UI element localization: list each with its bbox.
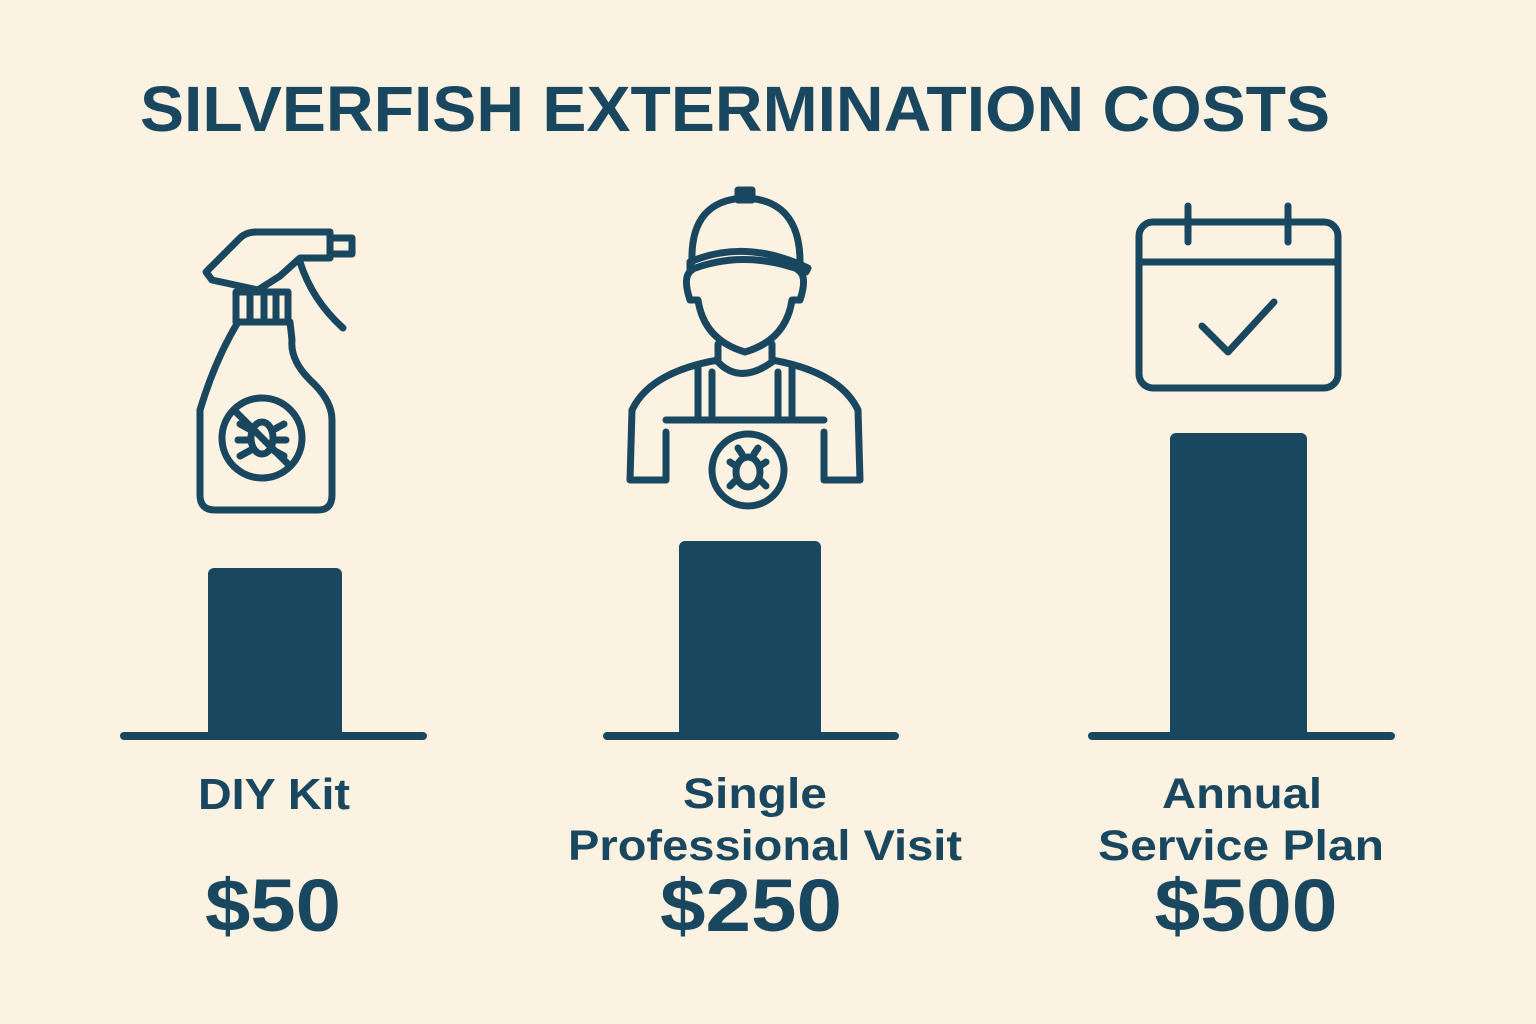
- title: SILVERFISH EXTERMINATION COSTS: [140, 73, 1330, 145]
- icon: exterminator worker: [630, 190, 860, 506]
- label: Annual Service Plan: [1098, 770, 1384, 947]
- label: Single Professional Visit: Professional Visit: [568, 822, 962, 870]
- label: DIY Kit: DIY Kit: [198, 770, 350, 819]
- icon: calendar with check: [1139, 206, 1338, 388]
- label: DIY Kit: $50: [205, 864, 341, 947]
- label: Annual Service Plan: Service Plan: [1098, 822, 1384, 870]
- label: Annual Service Plan: $500: [1154, 864, 1338, 947]
- icon: spray bottle: [200, 232, 352, 510]
- label: Annual Service Plan: Annual: [1162, 770, 1322, 818]
- label: Single Professional Visit: [568, 770, 962, 947]
- label: Single Professional Visit: $250: [660, 864, 842, 947]
- label: DIY Kit: [198, 770, 350, 947]
- label: Single Professional Visit: Single: [683, 770, 827, 818]
- bar chart: [120, 433, 1395, 740]
